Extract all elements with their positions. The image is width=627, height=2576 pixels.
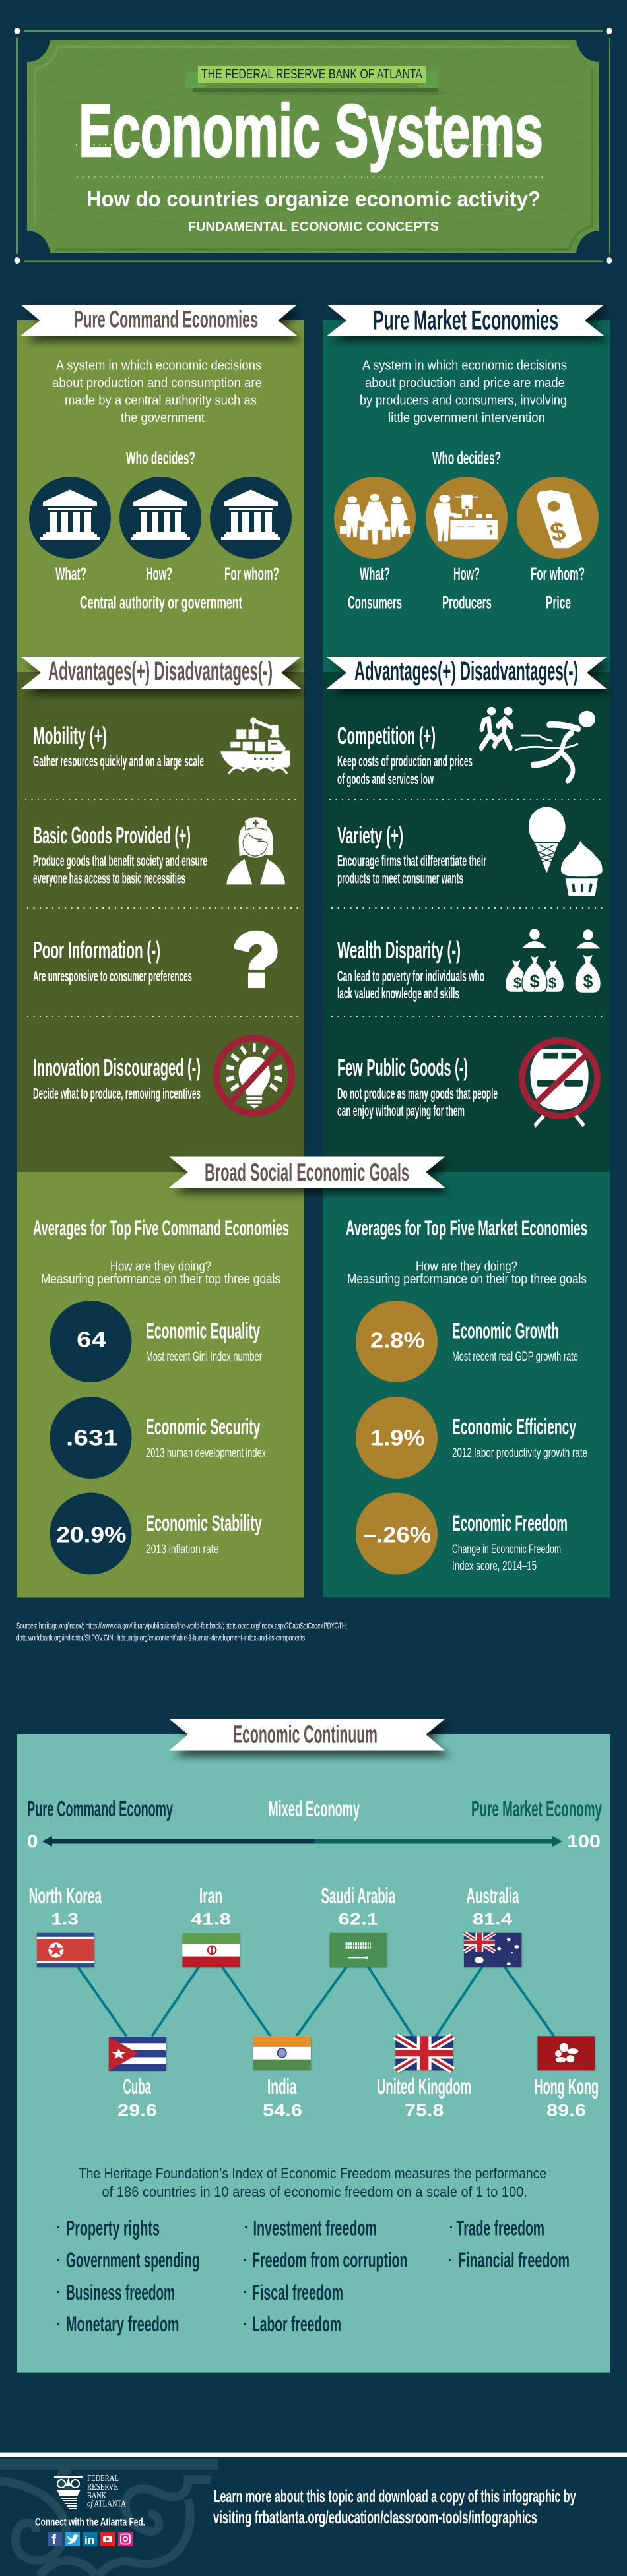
scale labels: Mixed Economy xyxy=(268,1796,360,1821)
ribbon: economic continuum: Economic Continuum xyxy=(233,1721,378,1749)
panel: market advantages and disadvantages xyxy=(323,657,610,1172)
country: cuba xyxy=(109,2037,166,2120)
goal: economic growth xyxy=(452,1319,578,1364)
country: cuba: 29.6 xyxy=(117,2101,157,2120)
footer xyxy=(0,2453,627,2576)
item: wealth disparity xyxy=(337,936,484,1002)
sources xyxy=(16,1622,347,1643)
item: wealth disparity: lack valued knowledge and skills xyxy=(337,985,459,1002)
icon: government how xyxy=(119,477,201,559)
arrow scale: 0 xyxy=(27,1831,38,1851)
icon: linkedin xyxy=(82,2532,97,2546)
list: freedom areas column 3: Trade freedom xyxy=(457,2216,544,2240)
stat: 2.8%: 2.8% xyxy=(370,1328,425,1352)
question labels xyxy=(360,564,585,584)
item: variety: Encourage firms that differentiate their xyxy=(337,852,486,869)
icon: money bags and people: $ xyxy=(513,975,521,991)
title plaque xyxy=(27,40,599,253)
icon: runners xyxy=(481,707,595,781)
connect line: Connect with the Atlanta Fed. xyxy=(35,2515,145,2529)
list: freedom areas column 1 xyxy=(57,2216,199,2336)
item: variety: products to meet consumer wants xyxy=(337,869,463,886)
list: freedom areas column 3 xyxy=(449,2216,570,2272)
ribbon: broad social economic goals xyxy=(169,1157,445,1188)
description xyxy=(52,358,262,425)
goal: economic freedom: Index score, 2014–15 xyxy=(452,1559,537,1574)
icon: price tag: $ xyxy=(548,516,568,548)
how are they doing: How are they doing? xyxy=(416,1259,517,1274)
item: poor information xyxy=(33,936,192,985)
country: cuba: Cuba xyxy=(123,2074,151,2099)
icon: government what xyxy=(29,477,111,559)
panel: market economy goals xyxy=(323,1172,610,1597)
logo: federal reserve bank of atlanta: RESERVE xyxy=(87,2482,118,2492)
icon: facebook: f xyxy=(51,2532,57,2548)
panel: command advantages and disadvantages xyxy=(17,657,304,1172)
sources: Sources: heritage.org/index/; https://www.cia.gov/library/publications/the-world-factbook/; stats.oecd.org/Index.aspx?DataSetCode=PDYGTH; xyxy=(16,1622,347,1631)
item: innovation discouraged: Innovation Discouraged (-) xyxy=(33,1054,201,1081)
item: basic goods: everyone has access to basic necessities xyxy=(33,869,185,886)
icon: money bags and people xyxy=(506,929,601,993)
item: few public goods xyxy=(337,1054,498,1119)
item: few public goods: Few Public Goods (-) xyxy=(337,1054,468,1081)
item: competition: Competition (+) xyxy=(337,722,436,749)
answer labels xyxy=(348,593,571,613)
question labels: For whom? xyxy=(224,564,279,584)
goal: economic security xyxy=(146,1415,266,1460)
country: united kingdom: United Kingdom xyxy=(377,2074,471,2099)
panel: economic continuum xyxy=(17,1719,610,2373)
stat: 1.9%: 1.9% xyxy=(370,1426,425,1450)
item: basic goods: Produce goods that benefit society and ensure xyxy=(33,852,207,869)
country: india: India xyxy=(267,2074,297,2099)
item: variety xyxy=(337,822,486,886)
goal: economic equality: Most recent Gini Index number xyxy=(146,1349,262,1364)
description xyxy=(360,358,567,425)
icon: consumers xyxy=(334,477,416,559)
answer label: Central authority or government xyxy=(80,593,242,613)
stat: .631: .631 xyxy=(66,1426,118,1450)
logo: federal reserve bank of atlanta: BANK xyxy=(87,2491,106,2501)
country: australia xyxy=(464,1884,521,1967)
who decides: Who decides? xyxy=(126,448,195,468)
banner: the federal reserve bank of atlanta xyxy=(184,66,439,92)
who decides: Who decides? xyxy=(432,448,501,468)
country: australia: Australia xyxy=(466,1884,519,1908)
heritage foundation note xyxy=(79,2165,546,2200)
icon: train prohibited xyxy=(522,1041,597,1126)
description: about production and price are made xyxy=(365,375,565,390)
sources: data.worldbank.org/indicator/SI.POV.GINI; hdr.undp.org/en/content/table-1-human-development-index-and-its-components xyxy=(16,1634,305,1643)
list: freedom areas column 1: Business freedom xyxy=(66,2281,175,2304)
banner: the federal reserve bank of atlanta: THE FEDERAL RESERVE BANK OF ATLANTA xyxy=(201,66,422,82)
footer watermark xyxy=(0,2459,218,2576)
stat: 1.9% xyxy=(356,1397,438,1479)
description: made by a central authority such as xyxy=(65,393,257,408)
item: basic goods xyxy=(33,822,207,886)
scale labels: Pure Command Economy xyxy=(27,1796,173,1821)
item: few public goods: can enjoy without paying for them xyxy=(337,1102,465,1119)
logo: federal reserve bank of atlanta: FEDERAL xyxy=(87,2474,119,2484)
goal: economic equality xyxy=(146,1319,262,1364)
question labels: How? xyxy=(146,564,172,584)
description: the government xyxy=(121,410,205,425)
how are they doing xyxy=(41,1259,280,1287)
ribbon: advantages disadvantages: Advantages(+) Disadvantages(-) xyxy=(48,657,273,686)
list: freedom areas column 2: Fiscal freedom xyxy=(252,2281,343,2304)
icon: cargo ship xyxy=(220,717,290,774)
item: mobility: Gather resources quickly and on a large scale xyxy=(33,752,204,770)
ribbon: broad social economic goals: Broad Social Economic Goals xyxy=(205,1159,409,1186)
goal: economic equality: Economic Equality xyxy=(146,1319,260,1344)
goal: economic freedom: Change in Economic Freedom xyxy=(452,1542,561,1556)
heritage foundation note: of 186 countries in 10 areas of economic freedom on a scale of 1 to 100. xyxy=(102,2184,527,2200)
stat: -.26%: –.26% xyxy=(363,1522,431,1547)
ribbon: advantages disadvantages xyxy=(21,657,301,689)
connector line xyxy=(78,1967,554,2036)
answer labels: Consumers xyxy=(348,593,402,613)
item: competition: of goods and services low xyxy=(337,770,434,787)
item: innovation discouraged xyxy=(33,1054,201,1102)
panel: pure market economies xyxy=(323,305,610,672)
list: freedom areas column 2 xyxy=(244,2216,408,2336)
goal: economic stability: Economic Stability xyxy=(146,1511,262,1536)
stat: 20.9%: 20.9% xyxy=(56,1522,127,1547)
goal: economic freedom xyxy=(452,1511,568,1574)
item: mobility: Mobility (+) xyxy=(33,722,107,749)
icon: instagram xyxy=(118,2532,133,2546)
ribbon: pure command economies xyxy=(21,305,297,336)
country: india xyxy=(253,2036,311,2120)
item: innovation discouraged: Decide what to produce, removing incentives xyxy=(33,1085,201,1102)
country: saudi arabia xyxy=(321,1884,395,1967)
heritage foundation note: The Heritage Foundation’s Index of Economic Freedom measures the performance xyxy=(79,2165,546,2182)
concepts line: FUNDAMENTAL ECONOMIC CONCEPTS xyxy=(188,219,439,234)
list: freedom areas column 1: Monetary freedom xyxy=(66,2312,180,2336)
icon: linkedin: in xyxy=(84,2534,94,2546)
stat: 64: 64 xyxy=(77,1327,107,1352)
learn more text xyxy=(213,2486,576,2527)
how are they doing xyxy=(347,1259,587,1287)
country: united kingdom xyxy=(377,2036,471,2120)
ribbon: pure command economies: Pure Command Economies xyxy=(74,305,258,332)
arrow scale: 100 xyxy=(567,1831,601,1851)
answer labels: Price xyxy=(546,593,571,613)
how are they doing: Measuring performance on their top three goals xyxy=(41,1272,280,1287)
country: united kingdom: 75.8 xyxy=(405,2101,444,2120)
icon: money bags and people: $ xyxy=(583,971,593,991)
how are they doing: Measuring performance on their top three goals xyxy=(347,1272,587,1287)
icon: question mark xyxy=(234,931,278,988)
item: poor information: Poor Information (-) xyxy=(33,936,160,964)
item: mobility xyxy=(33,722,204,770)
country: iran xyxy=(182,1884,240,1967)
item: variety: Variety (+) xyxy=(337,822,403,849)
country: australia: 81.4 xyxy=(473,1910,512,1928)
description: by producers and consumers, involving xyxy=(360,393,567,408)
icon: facebook xyxy=(48,2532,62,2548)
description: little government intervention xyxy=(388,410,545,425)
icon: producers xyxy=(426,477,508,559)
description: A system in which economic decisions xyxy=(362,358,567,373)
goal: economic efficiency xyxy=(452,1415,587,1460)
stat: 20.9% xyxy=(50,1493,132,1575)
icon: money bags and people: $ xyxy=(529,971,540,991)
country: north korea: North Korea xyxy=(29,1884,102,1908)
goal: economic stability: 2013 inflation rate xyxy=(146,1542,219,1556)
item: poor information: Are unresponsive to consumer preferences xyxy=(33,967,192,985)
question labels: For whom? xyxy=(531,564,585,584)
icon: nurse xyxy=(226,816,285,884)
country: iran: 41.8 xyxy=(191,1910,231,1928)
country: north korea: 1.3 xyxy=(51,1910,79,1928)
goal: economic security: Economic Security xyxy=(146,1415,261,1440)
scale labels xyxy=(27,1796,602,1821)
country: hong kong: 89.6 xyxy=(546,2101,586,2120)
country: iran: Iran xyxy=(199,1884,222,1908)
icon: twitter xyxy=(65,2532,80,2546)
list: freedom areas column 2: Investment freedom xyxy=(253,2216,377,2240)
header frame xyxy=(15,28,612,264)
ribbon: economic continuum xyxy=(169,1719,445,1750)
stat: 64 xyxy=(50,1301,132,1382)
country: hong kong xyxy=(535,2036,599,2120)
how are they doing: How are they doing? xyxy=(110,1259,211,1274)
country: saudi arabia: 62.1 xyxy=(338,1910,378,1928)
goal: economic stability xyxy=(146,1511,262,1556)
question labels xyxy=(55,564,279,584)
icon: light bulb prohibited xyxy=(216,1038,292,1113)
question labels: What? xyxy=(360,564,390,584)
list: freedom areas column 1: Government spending xyxy=(66,2248,199,2272)
subtitle: How do countries organize economic activity? xyxy=(86,187,541,211)
icon: youtube xyxy=(100,2532,115,2546)
description: A system in which economic decisions xyxy=(56,358,261,373)
stat: 2.8% xyxy=(356,1301,438,1382)
answer labels: Producers xyxy=(442,593,492,613)
stat: -.26% xyxy=(356,1493,438,1575)
icon: ice cream and cupcake xyxy=(529,807,603,896)
icon: money bags and people: $ xyxy=(548,975,556,991)
list: freedom areas column 1: Property rights xyxy=(66,2216,160,2240)
country: saudi arabia: Saudi Arabia xyxy=(321,1884,395,1908)
panel: command economy goals xyxy=(17,1172,304,1597)
question labels: What? xyxy=(55,564,86,584)
heading: Averages for Top Five Command Economies xyxy=(33,1216,289,1240)
item: wealth disparity: Can lead to poverty for individuals who xyxy=(337,967,484,985)
list: freedom areas column 2: Freedom from corruption xyxy=(252,2248,408,2272)
country: india: 54.6 xyxy=(263,2101,302,2120)
arrow scale xyxy=(27,1831,601,1851)
icon: government for whom xyxy=(210,477,292,559)
description: about production and consumption are xyxy=(52,375,262,390)
logo: federal reserve bank of atlanta xyxy=(54,2474,127,2509)
item: basic goods: Basic Goods Provided (+) xyxy=(33,822,191,849)
list: freedom areas column 2: Labor freedom xyxy=(252,2312,341,2336)
item: competition xyxy=(337,722,473,787)
stat: .631 xyxy=(50,1397,132,1479)
icon: price tag xyxy=(517,477,599,559)
goal: economic security: 2013 human development index xyxy=(146,1446,266,1460)
question labels: How? xyxy=(453,564,480,584)
item: wealth disparity: Wealth Disparity (-) xyxy=(337,936,461,964)
logo: federal reserve bank of atlanta: of ATLANTA xyxy=(87,2499,127,2509)
item: competition: Keep costs of production and prices xyxy=(337,752,473,770)
panel: pure command economies xyxy=(17,305,304,672)
country: north korea xyxy=(29,1884,102,1967)
